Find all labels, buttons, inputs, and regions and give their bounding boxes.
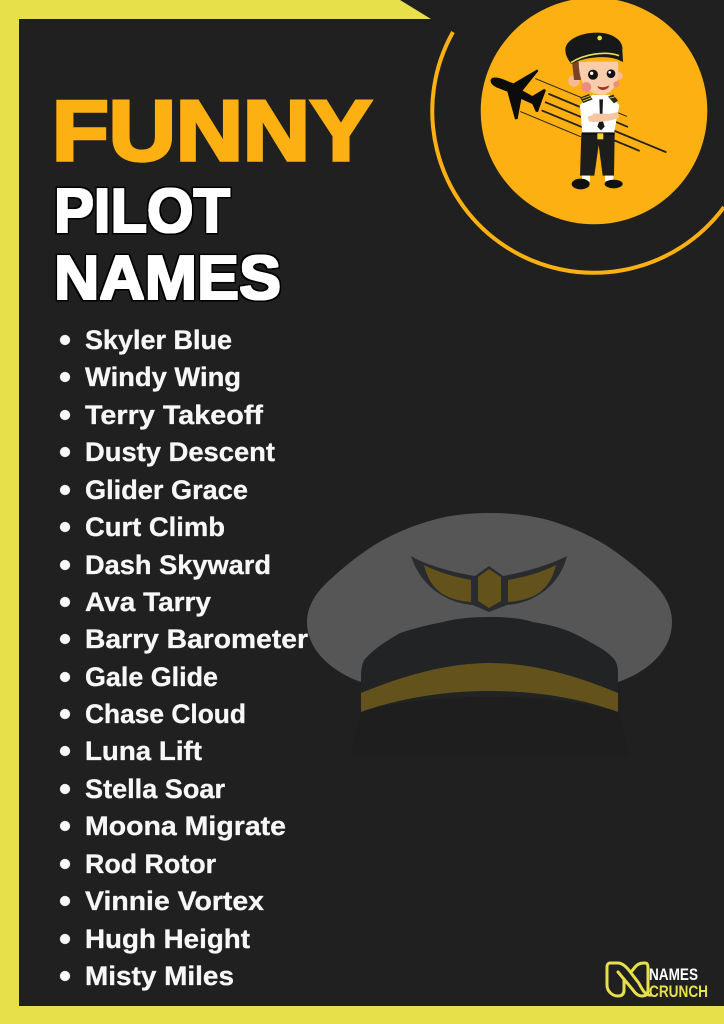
hat gold stripe: [361, 663, 618, 712]
hat lower shadow: [350, 697, 630, 755]
list of funny pilot names: Windy Wing: [85, 362, 241, 392]
face: [579, 62, 618, 95]
list of funny pilot names: Ava Tarry: [85, 587, 211, 617]
list of funny pilot names: Stella Soar: [85, 774, 225, 804]
logo: Names Crunch: NAMES: [649, 965, 698, 984]
legs: [580, 133, 615, 176]
shoes: [572, 179, 590, 189]
pilot hat watermark: [307, 513, 672, 755]
list of funny pilot names: Terry Takeoff: [85, 400, 264, 430]
mouth: [597, 85, 609, 90]
logo: Names Crunch: CRUNCH: [649, 982, 708, 1001]
tie: [597, 99, 605, 130]
cap: [565, 33, 623, 64]
list of funny pilot names: Skyler Blue: [85, 325, 232, 355]
list of funny pilot names: Vinnie Vortex: [85, 886, 264, 916]
icon: speed lines: [521, 79, 666, 152]
arms: [587, 111, 619, 122]
orange circle: [481, 0, 707, 224]
list of funny pilot names: Dusty Descent: [85, 437, 275, 467]
list of funny pilot names: Barry Barometer: [85, 624, 309, 654]
hat band: [361, 617, 618, 712]
list of funny pilot names: Rod Rotor: [85, 849, 216, 879]
icon: airplane: [491, 69, 546, 119]
ear: [568, 75, 580, 87]
logo: Names Crunch: [607, 963, 708, 1001]
list of funny pilot names: Luna Lift: [85, 736, 202, 766]
list of funny pilot names: Gale Glide: [85, 662, 218, 692]
bullets: [60, 335, 70, 981]
list of funny pilot names: Moona Migrate: [85, 811, 286, 841]
shirt: [580, 95, 619, 133]
epaulettes: [580, 94, 593, 103]
decorative orange arc: [432, 32, 724, 273]
list of funny pilot names: Glider Grace: [85, 475, 248, 505]
title: NAMES: NAMES: [54, 244, 281, 313]
icon: N logo: [607, 963, 651, 996]
hat crown: [307, 513, 672, 682]
list of funny pilot names: Hugh Height: [85, 924, 250, 954]
list of funny pilot names: Curt Climb: [85, 512, 225, 542]
illustration: plane and pilot: [491, 33, 666, 189]
list of funny pilot names: [60, 325, 309, 991]
hair: [572, 62, 587, 80]
hat wings badge: [411, 556, 567, 612]
icon: pilot character: [565, 33, 623, 189]
list of funny pilot names: Misty Miles: [85, 961, 234, 991]
title: FUNNY: FUNNY: [52, 84, 372, 179]
cheeks: [581, 82, 591, 92]
title: PILOT: PILOT: [54, 177, 230, 246]
list of funny pilot names: Dash Skyward: [85, 550, 271, 580]
list of funny pilot names: Chase Cloud: [85, 699, 246, 729]
eyes: [588, 70, 598, 80]
